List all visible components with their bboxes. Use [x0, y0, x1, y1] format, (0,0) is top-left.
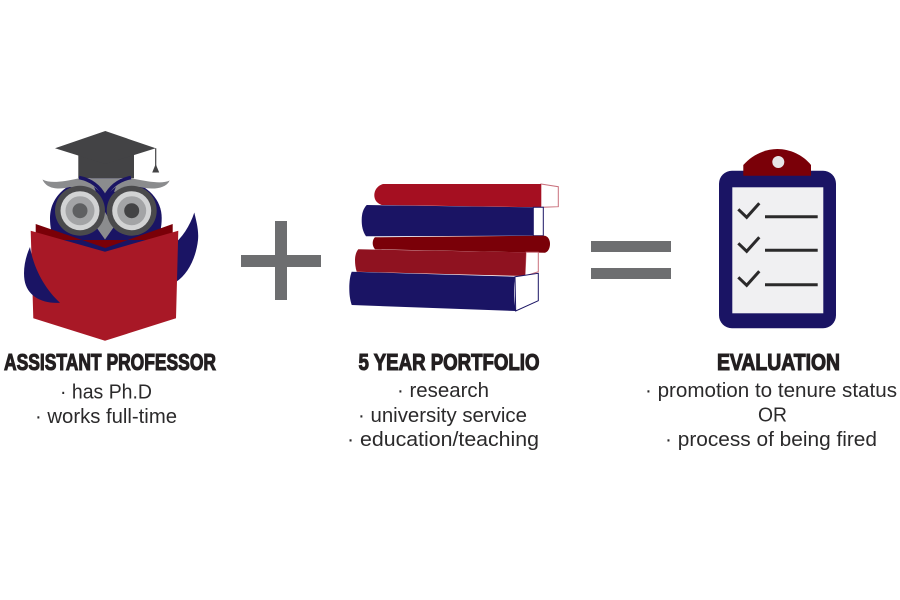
text: portfolio details: [347, 379, 539, 451]
top red book: [374, 184, 558, 207]
checklist row 1: [738, 203, 818, 217]
graduation cap: [55, 131, 159, 178]
head arcs between brows: [79, 178, 131, 197]
text: portfolio details: · university service: [358, 404, 527, 427]
equals sign: [591, 241, 671, 279]
right eye: [107, 186, 157, 236]
text: portfolio details: · education/teaching: [347, 428, 539, 451]
icon: owl professor reading a book: [24, 131, 198, 341]
text: evaluation details: · promotion to tenure status: [645, 379, 897, 402]
clip: [743, 149, 811, 176]
text: assistant professor details: · has Ph.D: [60, 380, 152, 404]
plus sign: [241, 221, 321, 300]
text: evaluation details: [645, 379, 897, 451]
thin dark red book: [373, 236, 550, 253]
owl right wing: [172, 212, 198, 282]
owl brows: [42, 178, 170, 196]
navy book: [362, 205, 543, 236]
icon: clipboard checklist: [719, 149, 836, 328]
heading: assistant professor: ASSISTANT PROFESSOR: [4, 349, 216, 375]
text: portfolio details: · research: [397, 379, 489, 402]
bottom navy book: [349, 272, 538, 311]
checklist row 3: [738, 271, 818, 285]
left eye: [55, 186, 105, 236]
heading: evaluation: EVALUATION: [717, 349, 840, 375]
heading: 5 year portfolio: 5 YEAR PORTFOLIO: [358, 349, 540, 375]
text: assistant professor details: · works full-time: [35, 405, 177, 428]
open red book: [31, 231, 178, 341]
owl head: [50, 177, 162, 262]
text: evaluation details: · process of being fired: [665, 428, 877, 451]
beak: [96, 212, 114, 240]
icon: stack of books: [349, 184, 558, 311]
clip hole: [772, 156, 784, 168]
text: evaluation details: OR: [758, 404, 787, 426]
checklist row 2: [738, 237, 818, 251]
owl left wing: [24, 247, 60, 303]
paper: [732, 187, 823, 313]
clipboard board: [719, 171, 836, 328]
book back cover: [36, 224, 173, 248]
red book: [355, 249, 538, 276]
text: assistant professor details: [35, 380, 177, 428]
